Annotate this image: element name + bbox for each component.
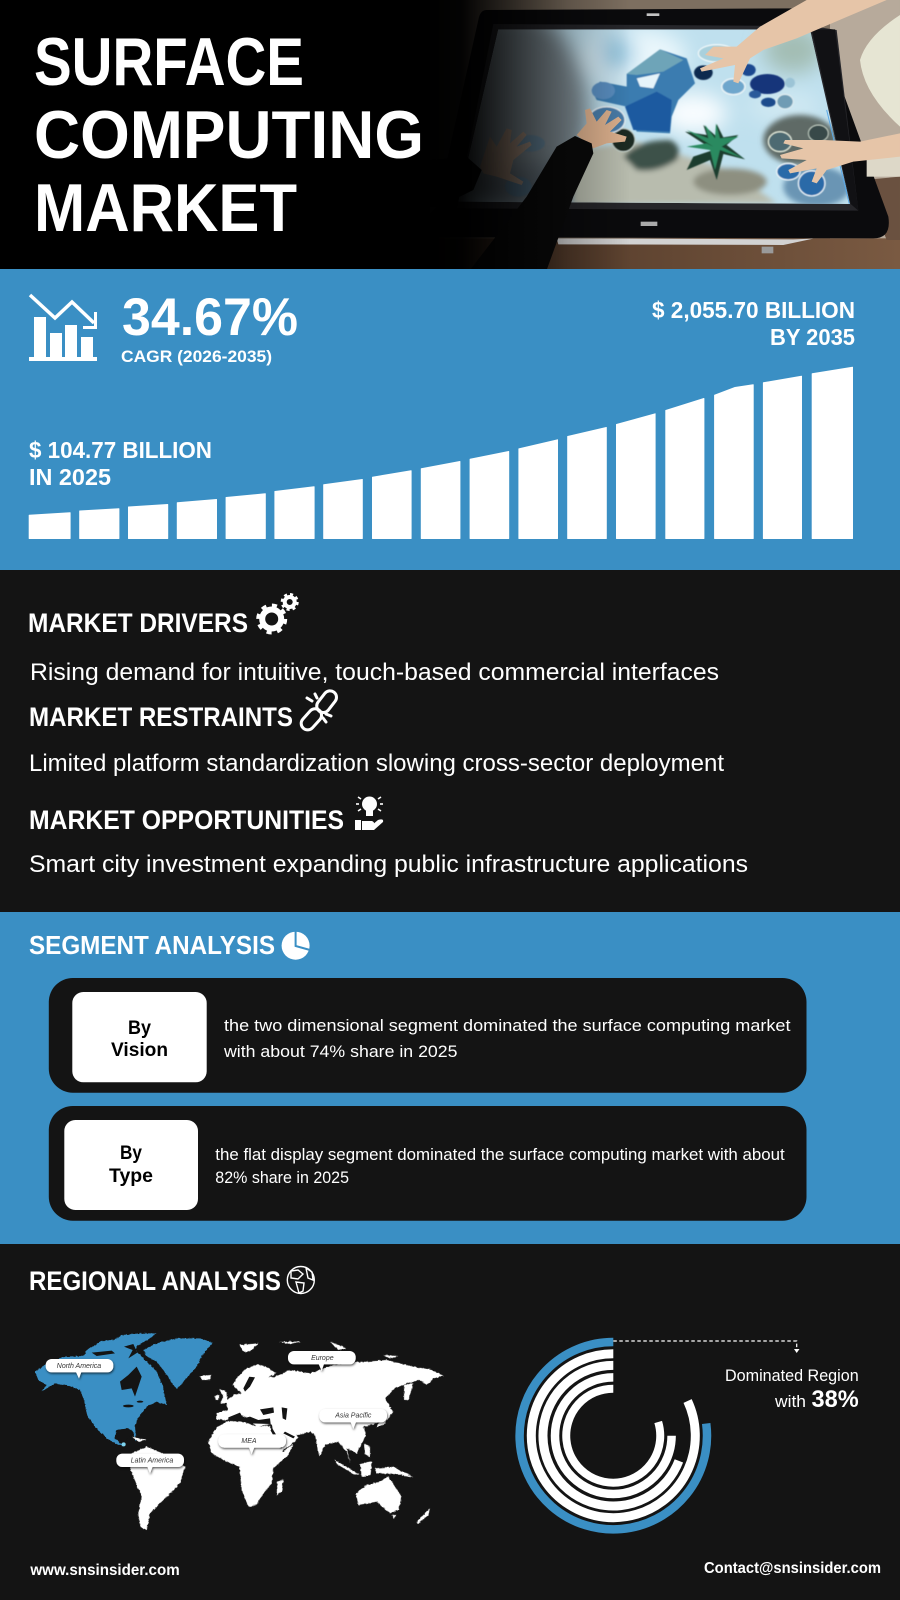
photo: hands on touch table <box>430 0 900 270</box>
heading: regional analysis: REGIONAL ANALYSIS <box>29 1266 281 1296</box>
2025 market value <box>29 437 212 490</box>
icon: broken chain <box>299 688 339 733</box>
text: vision segment: with about 74% share in 2025 <box>223 1042 458 1061</box>
CAGR value: 34.67% <box>122 288 298 347</box>
title <box>34 24 424 246</box>
icon: globe <box>287 1266 314 1294</box>
icon: chart with arrow <box>29 295 97 361</box>
2025 market value: IN 2025 <box>29 464 111 490</box>
callout: asia pacific: Asia Pacific <box>334 1413 372 1420</box>
heading: market opportunities: MARKET OPPORTUNITIES <box>29 805 344 835</box>
heading: segment analysis: SEGMENT ANALYSIS <box>29 930 275 960</box>
callout: mea: MEA <box>241 1438 257 1445</box>
card: by type <box>49 1106 807 1221</box>
callout: europe: Europe <box>311 1355 334 1362</box>
footer: contact: Contact@snsinsider.com <box>704 1560 881 1577</box>
label: by type: By <box>120 1143 142 1164</box>
label: by vision: Vision <box>111 1040 168 1061</box>
icon: pie chart <box>282 931 310 960</box>
callout: north america <box>46 1359 113 1379</box>
title: SURFACE <box>34 24 304 100</box>
text: vision segment <box>223 1016 791 1061</box>
footer: website: www.snsinsider.com <box>29 1562 180 1579</box>
map: dark bays of north america <box>92 1344 143 1442</box>
2035 market value <box>652 297 855 350</box>
text: type segment: 82% share in 2025 <box>215 1168 349 1187</box>
label: by type: Type <box>109 1166 153 1187</box>
header background <box>0 0 900 269</box>
panel: segment analysis <box>0 912 900 1244</box>
text: type segment <box>215 1145 785 1187</box>
bar chart: market growth <box>29 367 852 538</box>
callout: latin america <box>116 1454 184 1474</box>
title: MARKET <box>34 170 297 246</box>
callout: north america: North America <box>57 1363 101 1370</box>
text: driver: Rising demand for intuitive, touch-based commercial interfaces <box>30 659 719 686</box>
photo fade into black <box>420 0 630 269</box>
callout: asia pacific <box>319 1409 387 1429</box>
text: vision segment: the two dimensional segment dominated the surface computing market <box>224 1016 791 1035</box>
callout: latin america: Latin America <box>131 1458 173 1465</box>
map: north america highlighted <box>35 1333 213 1446</box>
text: opportunity: Smart city investment expanding public infrastructure applications <box>29 851 748 878</box>
card: by vision <box>49 978 807 1093</box>
heading: market restraints: MARKET RESTRAINTS <box>29 702 293 732</box>
text: restraint: Limited platform standardization slowing cross-sector deployment <box>29 750 724 777</box>
callout: europe <box>288 1351 356 1371</box>
callout: dominated region: Dominated Region <box>725 1367 859 1385</box>
panel: regional analysis <box>0 1244 900 1600</box>
world map <box>35 1333 444 1530</box>
2035 market value: BY 2035 <box>770 324 855 350</box>
text: type segment: the flat display segment dominated the surface computing market with about <box>215 1145 785 1164</box>
icon: bulb in hand <box>355 796 383 830</box>
map: other continents <box>128 1341 444 1530</box>
label: by vision: By <box>128 1018 151 1039</box>
panel: market dynamics <box>0 570 900 912</box>
callout: mea <box>218 1434 286 1454</box>
heading: market drivers: MARKET DRIVERS <box>28 608 248 638</box>
label: by vision <box>72 992 207 1082</box>
map: dark seas <box>228 1377 295 1449</box>
2025 market value: $ 104.77 BILLION <box>29 437 212 463</box>
title: COMPUTING <box>34 97 424 173</box>
radial bar chart <box>520 1342 707 1529</box>
icon: gears <box>258 594 297 632</box>
callout: dominated region: 38% <box>812 1386 859 1413</box>
panel: market size <box>0 269 900 570</box>
callout: dominated region <box>725 1367 859 1413</box>
label: by type <box>64 1120 198 1210</box>
2035 market value: $ 2,055.70 BILLION <box>652 297 855 323</box>
dashed arrow to callout <box>613 1341 800 1353</box>
CAGR label: CAGR (2026-2035) <box>121 347 272 366</box>
callout: dominated region: with <box>774 1393 806 1411</box>
